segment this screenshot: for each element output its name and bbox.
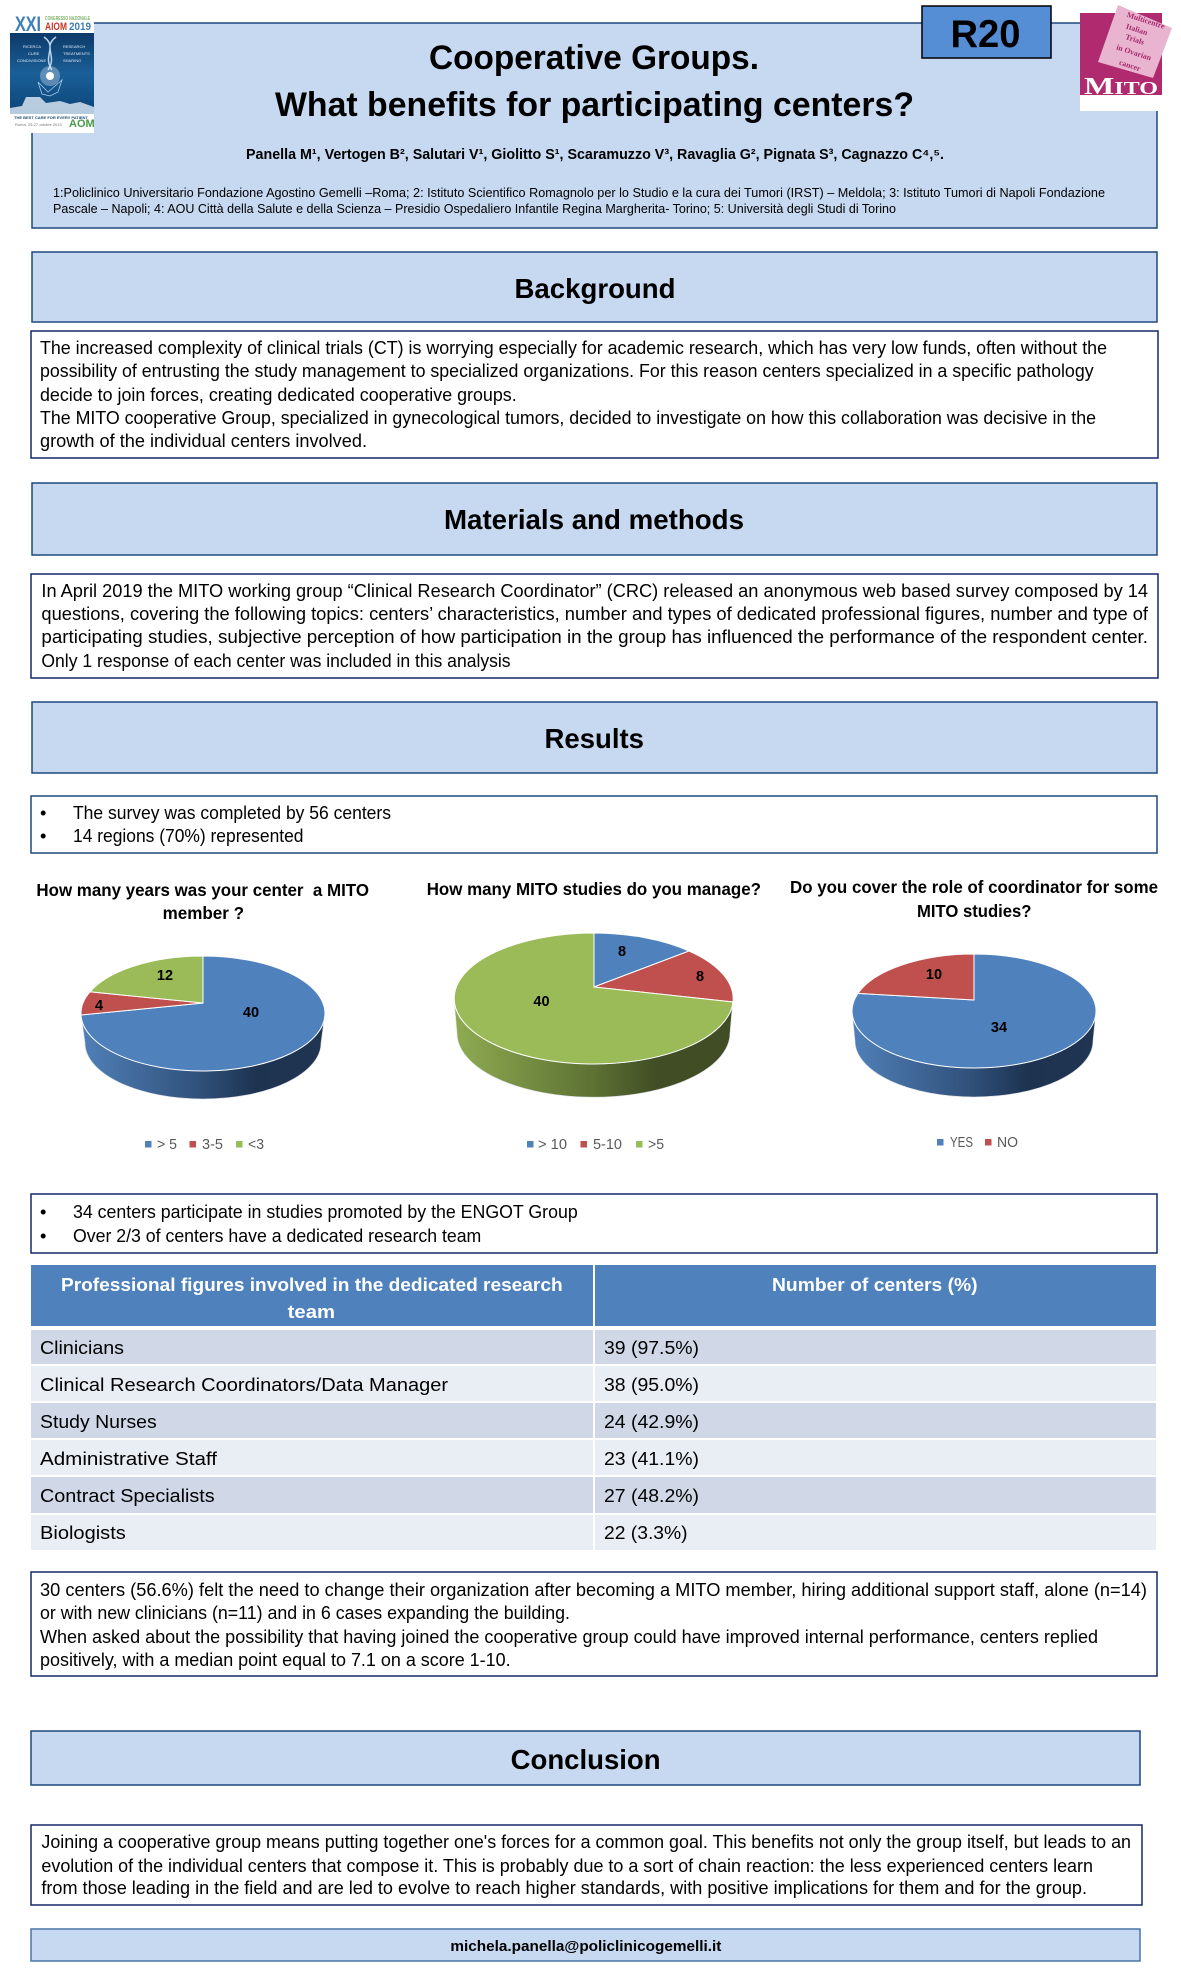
logo: MITO: in Ovarian xyxy=(1115,43,1153,63)
pie: 40 xyxy=(243,1005,259,1021)
logo: AIOM 2019 congress: XXI xyxy=(15,13,41,36)
authors: Panella M¹, Vertogen B², Salutari V¹, Giolitto S¹, Scaramuzzo V³, Ravaglia G², Pignata S³, Cagnazzo C⁴,⁵. xyxy=(246,147,944,163)
text block: organization change: 30 centers (56.6%) felt the need to change their organization after becoming a MITO member, hiring additional support staff, alone (n=14) xyxy=(40,1579,1147,1600)
table row: Clinical Research Coordinators xyxy=(31,1366,1156,1401)
legend: NO xyxy=(997,1135,1018,1151)
legend: YES xyxy=(950,1135,973,1151)
logo: AIOM 2019 congress: AOM xyxy=(69,118,95,130)
text block: survey bullets: 14 regions (70%) represented xyxy=(73,825,304,846)
table header: Professional figures involved in the dedicated research xyxy=(61,1274,563,1295)
text block: background: growth of the individual centers involved. xyxy=(40,430,367,451)
text block: materials and methods: In April 2019 the MITO working group “Clinical Research Coordinator” (CRC) released an anonymous web based survey composed by 14 xyxy=(41,580,1148,601)
logo: MITO xyxy=(1080,5,1172,111)
section heading: Materials and methods: Materials and methods xyxy=(444,504,744,535)
text block: ENGOT bullets: 34 centers participate in studies promoted by the ENGOT Group xyxy=(73,1201,578,1222)
chart title xyxy=(790,877,1158,921)
table row: Administrative Staff: 23 (41.1%) xyxy=(604,1448,699,1469)
text block: ENGOT bullets: Over 2/3 of centers have a dedicated research team xyxy=(73,1225,481,1246)
text block: conclusion: Joining a cooperative group means putting together one's forces for a common goal. This benefits not only the group itself, but leads to an xyxy=(41,1831,1131,1852)
affiliations: 1:Policlinico Universitario Fondazione Agostino Gemelli –Roma; 2: Istituto Scientifico Romagnolo per lo Studio e la cura dei Tumori (IRST) – Meldola; 3: Istituto Tumori di Napoli Fondazione xyxy=(53,185,1105,200)
text block: conclusion: evolution of the individual centers that compose it. This is probably due to a sort of chain reaction: the less experienced centers learn xyxy=(41,1855,1093,1876)
table row: Contract Specialists: 27 (48.2%) xyxy=(604,1485,699,1506)
chart title: MITO studies? xyxy=(917,901,1032,921)
logo: AIOM 2019 congress: SHARING xyxy=(63,58,81,63)
logo: MITO: Trials xyxy=(1124,32,1145,47)
text block: materials and methods: participating studies, subjective perception of how participation in the group has influenced the performance of the respondent center. xyxy=(41,626,1148,647)
text block: organization change: When asked about the possibility that having joined the cooperative group could have improved internal performance, centers replied xyxy=(40,1626,1098,1647)
contact email bar xyxy=(31,1929,1140,1961)
table row: Clinical Research Coordinators: Clinical Research Coordinators/Data Manager xyxy=(40,1374,448,1395)
logo: AIOM 2019 congress: 2019 xyxy=(69,21,91,33)
logo: AIOM 2019 congress: AIOM xyxy=(45,21,67,33)
chart title: Do you cover the role of coordinator for some xyxy=(790,877,1158,897)
logo: MITO: Multicentre xyxy=(1126,10,1166,31)
pie: 40 xyxy=(533,994,550,1010)
pie: 4 xyxy=(95,998,103,1014)
chart: years as MITO member xyxy=(36,880,369,1153)
table row: Clinicians: Clinicians xyxy=(40,1337,124,1358)
logo: AIOM 2019 congress: CURE xyxy=(28,51,40,56)
table row: Clinicians xyxy=(31,1330,1156,1364)
badge: R20 xyxy=(922,6,1051,58)
table row: Biologists: Biologists xyxy=(40,1522,126,1543)
pie xyxy=(454,933,733,1097)
panel: header xyxy=(32,23,1157,228)
logo: AIOM 2019 congress: RESEARCH xyxy=(63,44,85,49)
pie: 12 xyxy=(157,968,173,984)
text block: materials and methods xyxy=(31,574,1158,678)
legend: 5-10 xyxy=(593,1137,622,1153)
text block: materials and methods: Only 1 response of each center was included in this analysis xyxy=(41,650,511,671)
table row: Biologists xyxy=(31,1515,1156,1550)
logo: MITO: cancer xyxy=(1118,58,1142,73)
logo: MITO: Italian xyxy=(1125,22,1149,37)
text block: background xyxy=(31,331,1158,458)
legend: <3 xyxy=(248,1137,264,1153)
section heading: Background xyxy=(32,252,1157,322)
text block: conclusion: from those leading in the field and are led to evolve to reach higher standards, with positive implications for them and for the group. xyxy=(41,1877,1087,1898)
text block: background: The MITO cooperative Group, specialized in gynecological tumors, decided to investigate on how this collaboration was decisive in the xyxy=(40,407,1096,428)
section heading: Results xyxy=(32,702,1157,773)
legend xyxy=(527,1137,664,1153)
title xyxy=(275,39,914,124)
text block: background: decide to join forces, creating dedicated cooperative groups. xyxy=(40,384,517,405)
table row: Biologists: 22 (3.3%) xyxy=(604,1522,688,1543)
text block: background: possibility of entrusting the study management to specialized organizations. For this reason centers specialized in a specific pathology xyxy=(40,360,1094,381)
badge: R20: R20 xyxy=(950,13,1020,56)
text block: background: The increased complexity of clinical trials (CT) is worrying especially for academic research, which has very low funds, often without the xyxy=(40,337,1107,358)
table row: Administrative Staff: Administrative Staff xyxy=(40,1448,218,1469)
text block: ENGOT bullets: • xyxy=(40,1225,46,1246)
text block: organization change: or with new clinicians (n=11) and in 6 cases expanding the building. xyxy=(40,1602,570,1623)
logo: AIOM 2019 congress: CONGRESSO NAZIONALE xyxy=(45,16,90,22)
pie xyxy=(81,956,325,1099)
text block: survey bullets: • xyxy=(40,825,46,846)
text block: ENGOT bullets: • xyxy=(40,1201,46,1222)
text block: survey bullets: • xyxy=(40,802,46,823)
chart title: member ? xyxy=(163,903,244,923)
text block: ENGOT bullets xyxy=(31,1194,1157,1253)
chart: coordinator role xyxy=(790,877,1158,1151)
pie: 10 xyxy=(926,967,942,983)
pie: 8 xyxy=(696,969,704,985)
logo: AIOM 2019 congress: CONDIVISIONE xyxy=(17,58,46,63)
text block: organization change: positively, with a median point equal to 7.1 on a score 1-10. xyxy=(40,1649,511,1670)
table: professional figures xyxy=(31,1265,1156,1550)
section heading: Materials and methods xyxy=(32,483,1157,555)
pie xyxy=(852,954,1096,1097)
table header: Number of centers (%) xyxy=(772,1274,978,1295)
section heading: Conclusion: Conclusion xyxy=(511,1744,661,1775)
table header xyxy=(31,1265,1156,1326)
logo: AIOM 2019 congress: TREATMENTS xyxy=(63,51,90,56)
section heading: Conclusion xyxy=(31,1731,1140,1785)
table row: Study Nurses: Study Nurses xyxy=(40,1411,157,1432)
chart title: How many MITO studies do you manage? xyxy=(427,879,761,899)
text block: survey bullets xyxy=(31,796,1157,853)
pie: 8 xyxy=(618,944,626,960)
table row: Clinicians: 39 (97.5%) xyxy=(604,1337,699,1358)
table row: Contract Specialists: Contract Specialists xyxy=(40,1485,215,1506)
chart: MITO studies managed xyxy=(427,879,761,1153)
logo: MITO: M ITO xyxy=(1084,74,1158,100)
title: Cooperative Groups. xyxy=(429,39,759,77)
logo: AIOM 2019 congress xyxy=(10,13,95,133)
legend: > 10 xyxy=(538,1137,567,1153)
text block: conclusion xyxy=(31,1825,1142,1905)
logo: AIOM 2019 congress: RICERCA xyxy=(23,44,41,49)
table row: Administrative Staff xyxy=(31,1440,1156,1475)
text block: materials and methods: questions, covering the following topics: centers’ characteristics, number and types of dedicated professional figures, number and type of xyxy=(41,603,1149,624)
text block: organization change xyxy=(31,1572,1157,1676)
text block: survey bullets: The survey was completed by 56 centers xyxy=(73,802,391,823)
affiliations: Pascale – Napoli; 4: AOU Città della Salute e della Scienza – Presidio Ospedaliero Infantile Regina Margherita- Torino; 5: Università degli Studi di Torino xyxy=(53,201,896,216)
table header: team xyxy=(288,1301,335,1322)
chart title: How many years was your center a MITO xyxy=(36,880,369,900)
legend: > 5 xyxy=(157,1137,177,1153)
chart title xyxy=(36,880,369,923)
legend xyxy=(937,1135,1018,1151)
contact email bar: michela.panella@policlinicogemelli.it xyxy=(450,1938,721,1955)
legend: 3-5 xyxy=(202,1137,223,1153)
title: What benefits for participating centers? xyxy=(275,86,914,124)
legend xyxy=(145,1137,264,1153)
table row: Study Nurses: 24 (42.9%) xyxy=(604,1411,699,1432)
section heading: Results: Results xyxy=(544,723,644,754)
table row: Study Nurses xyxy=(31,1403,1156,1438)
logo: AIOM 2019 congress: Roma, 25-27 ottobre 2019 xyxy=(15,122,62,127)
section heading: Background: Background xyxy=(514,273,676,304)
logo: AIOM 2019 congress: THE BEST CARE FOR EVERY PATIENT xyxy=(14,115,88,120)
affiliations xyxy=(53,185,1105,216)
table row: Contract Specialists xyxy=(31,1477,1156,1513)
pie: 34 xyxy=(991,1020,1007,1036)
table row: Clinical Research Coordinators: 38 (95.0%) xyxy=(604,1374,699,1395)
legend: >5 xyxy=(648,1137,664,1153)
